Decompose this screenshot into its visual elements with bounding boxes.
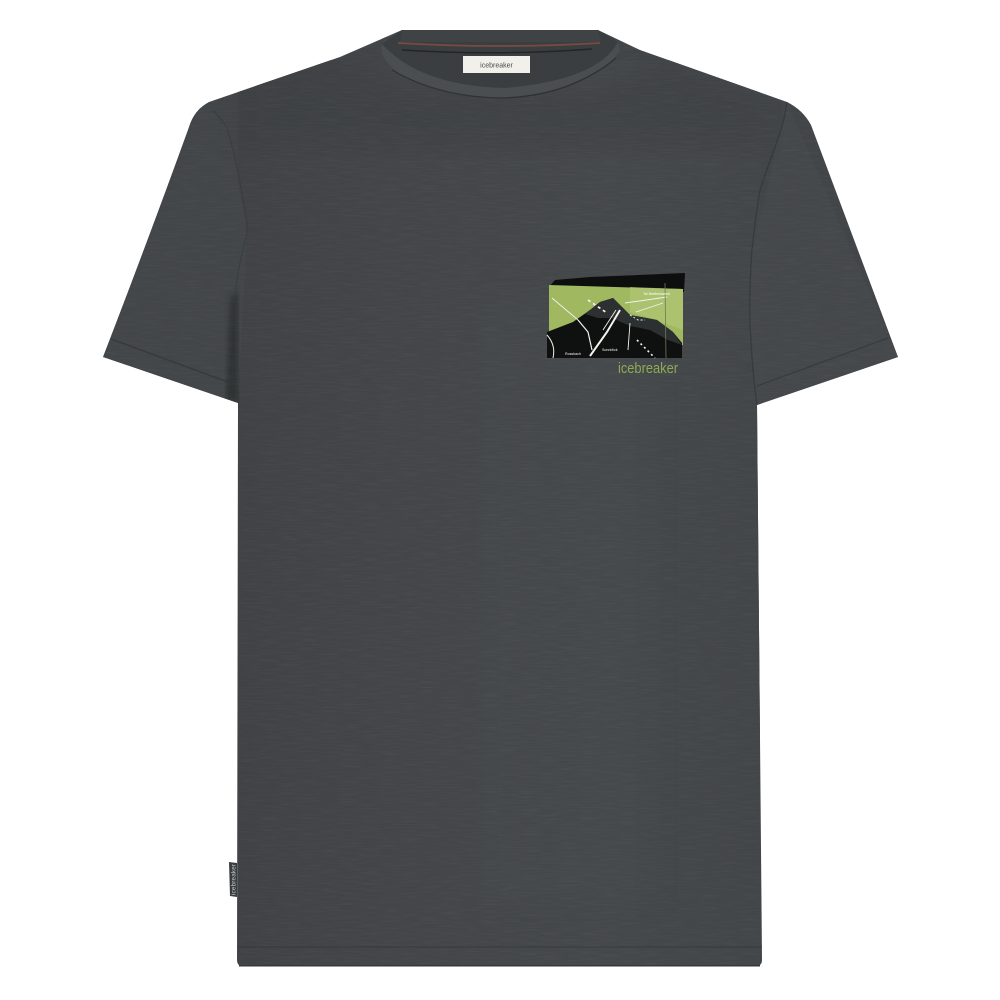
grey shaded ridge [585,298,682,345]
woven neck label [463,56,530,73]
print tiny map labels [565,292,670,356]
bottom hem [238,946,762,948]
black mountain silhouette [547,298,682,358]
print wordmark: icebreaker [618,361,678,377]
woven neck label: icebreaker [480,62,514,70]
vertical print scratch [665,283,666,358]
left armhole seam [213,110,247,403]
print tiny map labels: Tal Bretterklamm [643,292,670,296]
right armhole seam [750,102,787,405]
inner shadow line [402,49,592,53]
black torn top band [549,273,685,292]
collar [381,30,620,98]
back neck band [400,30,601,42]
collar lower stitch [392,58,616,98]
side hem tag: icebreaker [230,864,238,895]
paler right of sky [630,287,683,330]
shirt body and sleeves silhouette [103,30,898,966]
t-shirt garment [103,30,898,966]
white map route lines [547,297,667,358]
right sleeve hem [757,338,888,386]
print tiny map labels: Rossbach [565,352,581,356]
green sky panel [549,285,683,345]
inner neck back [382,30,618,88]
left sleeve hem [111,339,236,385]
product image: t-shirt [103,30,898,966]
fabric shading [103,58,898,965]
print tiny map labels: Sonnblick [602,348,618,352]
chest print graphic [547,273,685,377]
ribbed collar band [381,42,620,98]
red neck tape [398,43,600,46]
